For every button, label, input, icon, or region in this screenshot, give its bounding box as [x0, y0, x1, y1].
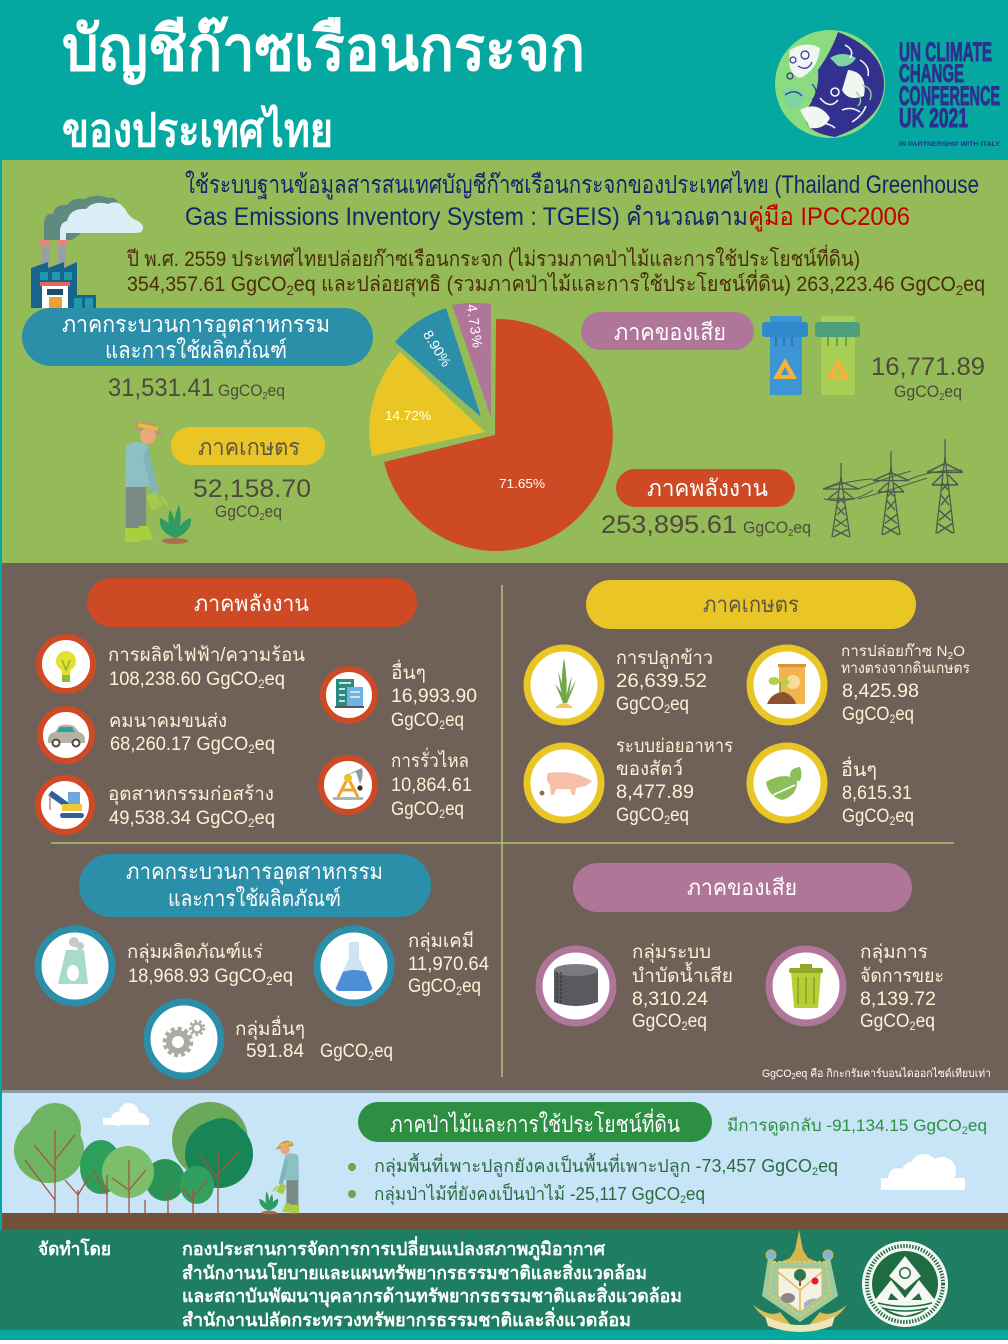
item: direct N2O from soil: O	[953, 643, 965, 660]
panel: industry sector summary: และการใช้ผลิตภัณฑ์	[105, 337, 287, 363]
UN climate conference logo text: CHANGE	[899, 60, 964, 88]
panel: agriculture sector summary: GgCO	[215, 502, 263, 521]
item: electricity and heat: 108,238.60 GgCO	[109, 669, 263, 690]
item: direct N2O from soil	[750, 643, 970, 726]
forestry total: 2	[962, 1125, 968, 1137]
item: transport: คมนาคมขนส่ง	[109, 711, 227, 732]
item: fugitive emissions	[321, 747, 472, 821]
item: enteric fermentation: 8,477.89	[616, 782, 694, 803]
item: wastewater: กลุ่มระบบ	[632, 942, 711, 964]
item: solid waste: 8,139.72	[860, 989, 936, 1010]
heading: waste	[573, 863, 912, 912]
panel: industry sector summary: GgCO	[218, 381, 266, 400]
illustration: trees	[14, 1102, 253, 1214]
item: other industry: กลุ่มอื่นๆ	[235, 1015, 305, 1041]
item: other energy: 2	[439, 718, 445, 732]
item: construction industry	[38, 778, 275, 832]
item: rice cultivation: eq	[670, 694, 689, 715]
item: rice cultivation: 2	[664, 702, 670, 716]
intro text	[185, 170, 979, 232]
panel: energy sector summary	[601, 469, 811, 539]
item: chemicals: eq	[462, 976, 481, 997]
summary text: 354,357.61 GgCO	[127, 273, 297, 296]
panel: waste sector summary: eq	[944, 382, 962, 401]
panel: agriculture sector summary: 52,158.70	[193, 475, 311, 503]
pie chart: 14.72%	[385, 408, 431, 423]
item: electricity and heat: การผลิตไฟฟ้า/ความร้อน	[108, 644, 305, 666]
item: solid waste: จัดการขยะ	[860, 966, 944, 987]
item: wastewater: 8,310.24	[632, 989, 708, 1010]
panel: waste sector summary: GgCO	[894, 382, 942, 401]
panel: forestry heading	[358, 1102, 712, 1142]
panel: waste sector summary: ภาคของเสีย	[614, 319, 726, 345]
panel: industry details	[38, 854, 489, 1076]
item: other industry: GgCO	[320, 1041, 374, 1062]
title: บัญชีก๊าซเรือนกระจก	[62, 15, 585, 85]
item: fugitive emissions: 10,864.61	[391, 775, 472, 796]
item: other agriculture: อื่นๆ	[841, 756, 877, 781]
panel: industry sector summary: 2	[262, 391, 268, 402]
forestry bullets	[348, 1153, 838, 1206]
item: chemicals: 11,970.64	[408, 954, 489, 975]
item: construction industry: 2	[248, 816, 255, 830]
item: other agriculture: 8,615.31	[842, 783, 912, 804]
summary text: 2	[286, 282, 294, 298]
panel: industry sector summary: ภาคกระบวนการอุตสาหกรรม	[62, 311, 330, 338]
forestry total: มีการดูดกลับ -91,134.15 GgCO	[727, 1116, 960, 1135]
item: enteric fermentation: ของสัตว์	[616, 758, 683, 780]
item: transport: 2	[248, 742, 255, 756]
heading: agriculture: ภาคเกษตร	[703, 592, 799, 617]
UN climate conference logo text: IN PARTNERSHIP WITH ITALY	[899, 142, 1000, 148]
panel: agriculture sector summary: eq	[265, 502, 282, 521]
summary text: 2	[956, 282, 963, 298]
item: transport	[40, 709, 275, 761]
forestry bullets: กลุ่มพื้นที่เพาะปลูกยังคงเป็นพื้นที่เพาะปลูก -73,457 GgCO	[374, 1156, 814, 1176]
item: direct N2O from soil: GgCO	[842, 704, 896, 725]
panel: agriculture sector summary	[171, 427, 325, 523]
item: rice cultivation: GgCO	[616, 694, 670, 715]
item: enteric fermentation: ระบบย่อยอาหาร	[616, 736, 733, 757]
panel: waste sector summary: 16,771.89	[871, 353, 985, 381]
panel: energy sector summary: 253,895.61	[601, 511, 737, 539]
item: other industry: eq	[374, 1041, 393, 1062]
item: wastewater	[539, 942, 733, 1033]
item: fugitive emissions: GgCO	[391, 799, 445, 820]
icon: cloud large	[881, 1154, 965, 1190]
item: solid waste	[769, 942, 944, 1033]
item: other energy: eq	[445, 710, 464, 731]
intro text: Gas Emissions Inventory System : TGEIS) คำนวณตาม	[185, 203, 748, 231]
item: other agriculture: 2	[889, 814, 896, 828]
icon: ministry seal	[862, 1241, 948, 1327]
item: direct N2O from soil: 2	[889, 712, 896, 726]
pie chart: 71.65%	[499, 476, 545, 491]
heading: industry	[79, 854, 431, 917]
title	[62, 15, 585, 156]
footnote: 2	[792, 1072, 796, 1081]
item: chemicals: GgCO	[408, 976, 462, 997]
item: transport: eq	[255, 734, 275, 755]
item: other agriculture	[750, 746, 914, 828]
panel: agriculture sector summary: 2	[259, 512, 265, 523]
item: other agriculture: GgCO	[842, 806, 896, 827]
item: construction industry: 49,538.34 GgCO	[109, 808, 253, 829]
item: chemicals: กลุ่มเคมี	[408, 930, 474, 953]
panel: energy sector summary: ภาคพลังงาน	[647, 475, 768, 501]
UN climate conference logo text	[899, 37, 1000, 148]
item: construction industry: eq	[255, 808, 275, 829]
item: mineral products: 18,968.93 GgCO	[128, 966, 272, 987]
item: solid waste: 2	[909, 1019, 916, 1033]
item: rice cultivation: การปลูกข้าว	[616, 648, 713, 669]
heading: industry: ภาคกระบวนการอุตสาหกรรม	[126, 859, 383, 885]
heading: waste: ภาคของเสีย	[687, 875, 797, 900]
icon: ministry crest	[753, 1230, 847, 1332]
dividers	[51, 585, 954, 1077]
item: mineral products: eq	[273, 966, 293, 987]
item: rice cultivation	[527, 648, 713, 722]
heading: energy	[87, 578, 417, 627]
icon: globe logo	[775, 30, 885, 138]
item: electricity and heat: eq	[265, 669, 285, 690]
item: direct N2O from soil: 2	[947, 651, 954, 662]
item: other energy: อื่นๆ	[391, 659, 426, 684]
item: wastewater: บำบัดน้ำเสีย	[632, 962, 733, 987]
pie chart	[369, 303, 613, 551]
item: wastewater: eq	[688, 1011, 707, 1032]
heading: industry: และการใช้ผลิตภัณฑ์	[168, 886, 341, 911]
forestry bullets: กลุ่มป่าไม้ที่ยังคงเป็นป่าไม้ -25,117 GgCO	[374, 1184, 695, 1204]
item: other industry: 591.84	[246, 1041, 304, 1062]
item: fugitive emissions: eq	[445, 799, 464, 820]
forestry bullets: eq	[818, 1156, 838, 1176]
icon: power pylons	[823, 439, 963, 537]
item: mineral products: กลุ่มผลิตภัณฑ์แร่	[127, 941, 263, 964]
panel: industry sector summary: 31,531.41	[108, 374, 214, 402]
item: chemicals	[317, 929, 489, 1003]
item: enteric fermentation: 2	[664, 813, 670, 827]
panel: agriculture sector summary: ภาคเกษตร	[198, 434, 300, 460]
item: other industry: 2	[368, 1049, 374, 1063]
item: other energy: 16,993.90	[391, 686, 477, 707]
item: other agriculture: eq	[895, 806, 914, 827]
item: fugitive emissions: 2	[439, 807, 445, 821]
item: fugitive emissions: การรั่วไหล	[391, 747, 469, 772]
item: direct N2O from soil: 8,425.98	[842, 681, 919, 702]
item: electricity and heat	[39, 637, 305, 691]
heading: energy: ภาคพลังงาน	[194, 591, 309, 616]
icon: farmer in forest	[259, 1140, 299, 1214]
summary text: eq และปล่อยสุทธิ (รวมภาคป่าไม้และการใช้ประโยชน์ที่ดิน) 263,223.46 GgCO	[294, 269, 956, 297]
UN climate conference logo text: UK 2021	[899, 103, 968, 133]
footer credits	[38, 1236, 682, 1330]
item: solid waste: GgCO	[860, 1011, 914, 1032]
footer credits: จัดทำโดย	[38, 1238, 111, 1259]
footer credits: สำนักงานปลัดกระทรวงทรัพยากรธรรมชาติและสิ่งแวดล้อม	[182, 1307, 631, 1330]
item: electricity and heat: 2	[258, 677, 265, 691]
item: direct N2O from soil: การปล่อยก๊าซ N	[841, 643, 946, 660]
panel: energy sector summary: GgCO	[743, 518, 791, 537]
panel: energy sector summary: 2	[788, 528, 794, 539]
footer credits: กองประสานการจัดการการเปลี่ยนแปลงสภาพภูมิอากาศ	[182, 1236, 606, 1261]
panel: waste sector summary: 2	[939, 392, 945, 403]
item: solid waste: eq	[916, 1011, 935, 1032]
footnote: eq คือ กิกะกรัมคาร์บอนไดออกไซด์เทียบเท่า	[796, 1067, 991, 1080]
item: wastewater: 2	[681, 1019, 688, 1033]
summary text: eq	[963, 273, 985, 296]
panel: waste sector summary	[581, 312, 985, 403]
item: other industry	[147, 1002, 393, 1076]
forestry bullets: eq	[686, 1184, 705, 1204]
item: direct N2O from soil: eq	[895, 704, 914, 725]
item: enteric fermentation	[527, 736, 733, 827]
footer credits: สำนักงานนโยบายและแผนทรัพยากรธรรมชาติและสิ่งแวดล้อม	[182, 1260, 647, 1283]
icon: farmer watering plant	[125, 421, 191, 544]
item: other energy	[323, 659, 477, 732]
pie chart: 4.73%	[464, 303, 486, 350]
panel: energy details	[38, 578, 477, 832]
item: wastewater: GgCO	[632, 1011, 686, 1032]
intro text: คู่มือ IPCC2006	[748, 203, 910, 232]
panel: agriculture details	[527, 580, 970, 828]
heading: agriculture	[586, 580, 916, 629]
forestry bullets: 2	[680, 1194, 686, 1206]
item: mineral products: 2	[266, 974, 273, 988]
item: solid waste: กลุ่มการ	[860, 942, 928, 964]
item: transport: 68,260.17 GgCO	[110, 734, 254, 755]
title: ของประเทศไทย	[62, 104, 333, 156]
icon: factory with smoke	[31, 196, 143, 308]
panel: energy sector summary: eq	[793, 518, 811, 537]
item: construction industry: อุตสาหกรรมก่อสร้าง	[108, 784, 274, 806]
icon: recycling bins	[762, 316, 860, 395]
icon: cloud small	[103, 1103, 149, 1126]
summary text	[126, 244, 985, 298]
summary text: ปี พ.ศ. 2559 ประเทศไทยปล่อยก๊าซเรือนกระจก (ไม่รวมภาคป่าไม้และการใช้ประโยชน์ที่ดิน)	[126, 244, 860, 271]
panel: industry sector summary: eq	[268, 381, 285, 400]
item: mineral products	[38, 929, 293, 1003]
panel: forestry heading: ภาคป่าไม้และการใช้ประโยชน์ที่ดิน	[390, 1108, 680, 1137]
item: other energy: GgCO	[391, 710, 445, 731]
footer credits: และสถาบันพัฒนาบุคลากรด้านทรัพยากรธรรมชาติและสิ่งแวดล้อม	[182, 1283, 682, 1308]
item: direct N2O from soil: ทางตรงจากดินเกษตร	[841, 660, 970, 677]
panel: waste details	[539, 863, 944, 1033]
item: rice cultivation: 26,639.52	[616, 671, 707, 692]
item: enteric fermentation: GgCO	[616, 805, 670, 826]
panel: industry sector summary	[22, 308, 373, 402]
pie chart: 8.90%	[420, 327, 455, 369]
forestry bullets: 2	[812, 1166, 818, 1178]
forestry total: eq	[968, 1116, 987, 1135]
footnote: GgCO	[762, 1068, 793, 1080]
item: enteric fermentation: eq	[670, 805, 689, 826]
item: chemicals: 2	[456, 984, 462, 998]
